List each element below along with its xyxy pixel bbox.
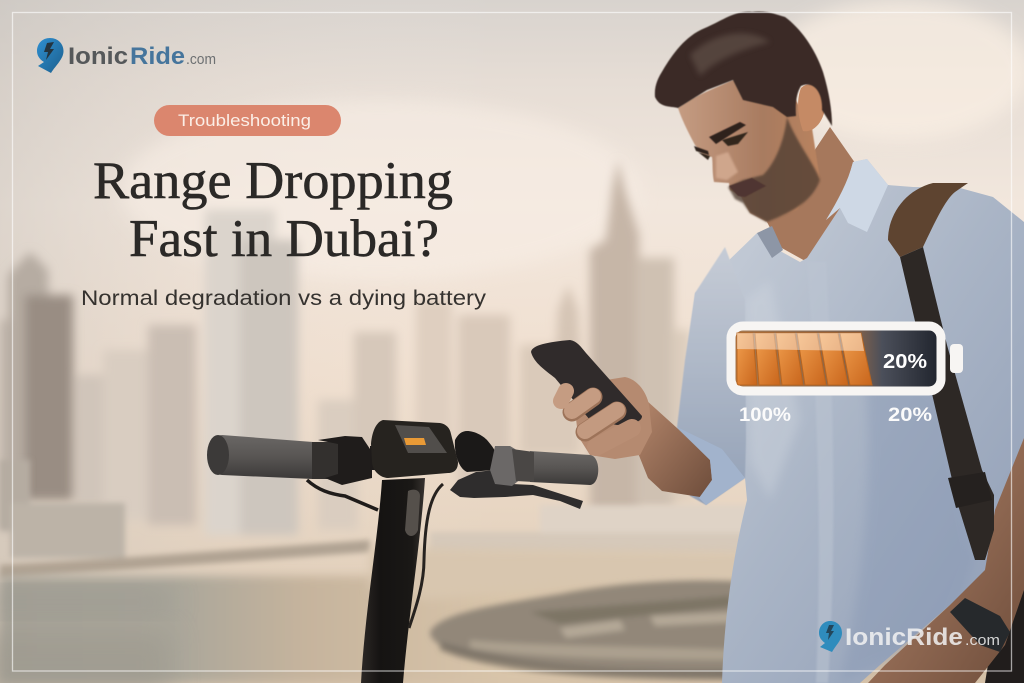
man: nose highlight <box>716 152 738 180</box>
man: shirt shading <box>840 330 975 683</box>
right lever assembly <box>450 470 583 509</box>
left grip cap <box>207 435 229 475</box>
background: palm island <box>430 580 750 680</box>
display unit <box>371 420 458 478</box>
display screen <box>395 425 447 453</box>
watermark wordmark: .com <box>965 632 1000 649</box>
man: shirt cuff <box>677 427 745 505</box>
man: face <box>678 80 820 222</box>
bottom logo watermark <box>819 621 1000 652</box>
man: neck <box>767 127 860 262</box>
man: right arm <box>868 438 1024 683</box>
watermark wordmark <box>845 624 1000 651</box>
display battery bars <box>404 438 426 445</box>
background: water <box>0 548 1024 683</box>
title <box>93 152 453 268</box>
logo pin icon <box>37 38 64 73</box>
left handlebar grip <box>208 435 313 479</box>
battery charged cells <box>737 333 872 385</box>
top logo <box>37 38 216 73</box>
man: strap leather shoulder <box>888 183 968 257</box>
man: phone <box>531 340 642 425</box>
logo wordmark: Ionic <box>68 43 128 70</box>
watermark wordmark: IonicRide <box>845 624 963 651</box>
title: Fast in Dubai? <box>129 210 439 268</box>
badge: Troubleshooting: Troubleshooting <box>178 112 311 130</box>
left bar clamp <box>318 436 372 485</box>
logo wordmark: Ride <box>130 43 185 70</box>
badge: Troubleshooting <box>154 105 341 136</box>
man: eyes <box>698 132 748 160</box>
man: ear <box>798 84 825 131</box>
battery terminal <box>950 344 963 373</box>
man: eyebrows <box>694 122 746 155</box>
man: sleeve arm <box>677 247 746 505</box>
brake cable <box>409 484 443 628</box>
battery graphic <box>731 326 963 391</box>
man: dark backdrop at lower right <box>985 590 1024 683</box>
battery cell gloss <box>737 333 864 351</box>
logo wordmark <box>68 43 216 70</box>
label: 100%: 100% <box>739 404 791 426</box>
stem clamp <box>405 490 420 536</box>
man: fingers over phone <box>561 391 632 447</box>
scooter <box>207 420 598 683</box>
scooter stem <box>361 478 425 683</box>
left brake cable <box>307 480 378 510</box>
battery percent: 20% <box>883 351 927 373</box>
left bar smooth section <box>312 442 342 479</box>
right silver collar <box>490 446 522 486</box>
man: bag strap lower <box>900 247 994 560</box>
man: shirt placket <box>807 262 833 683</box>
man: mouth <box>729 178 766 197</box>
man: collar <box>826 159 888 232</box>
right control unit <box>455 431 497 472</box>
man: hair highlight <box>690 33 770 76</box>
watermark pin icon <box>819 621 842 652</box>
background: low waterfront <box>0 460 760 578</box>
man: shirt body <box>680 159 1024 683</box>
man: beard <box>728 117 820 222</box>
man: forearm <box>636 400 712 497</box>
man: hair <box>655 11 832 126</box>
battery casing <box>731 326 941 391</box>
subtitle: Normal degradation vs a dying battery <box>81 287 487 310</box>
right handlebar grip <box>530 451 598 485</box>
logo wordmark: .com <box>186 51 216 68</box>
man: hand back <box>575 377 652 459</box>
man <box>531 11 1024 683</box>
background: blurred Dubai skyline <box>0 160 690 535</box>
label: 20%: 20% <box>888 404 932 426</box>
man: wristwatch <box>950 598 1010 652</box>
title: Range Dropping <box>93 152 453 210</box>
man: strap buckle <box>948 472 992 508</box>
central bar <box>370 446 450 470</box>
right grip ribbed collar <box>512 449 534 482</box>
